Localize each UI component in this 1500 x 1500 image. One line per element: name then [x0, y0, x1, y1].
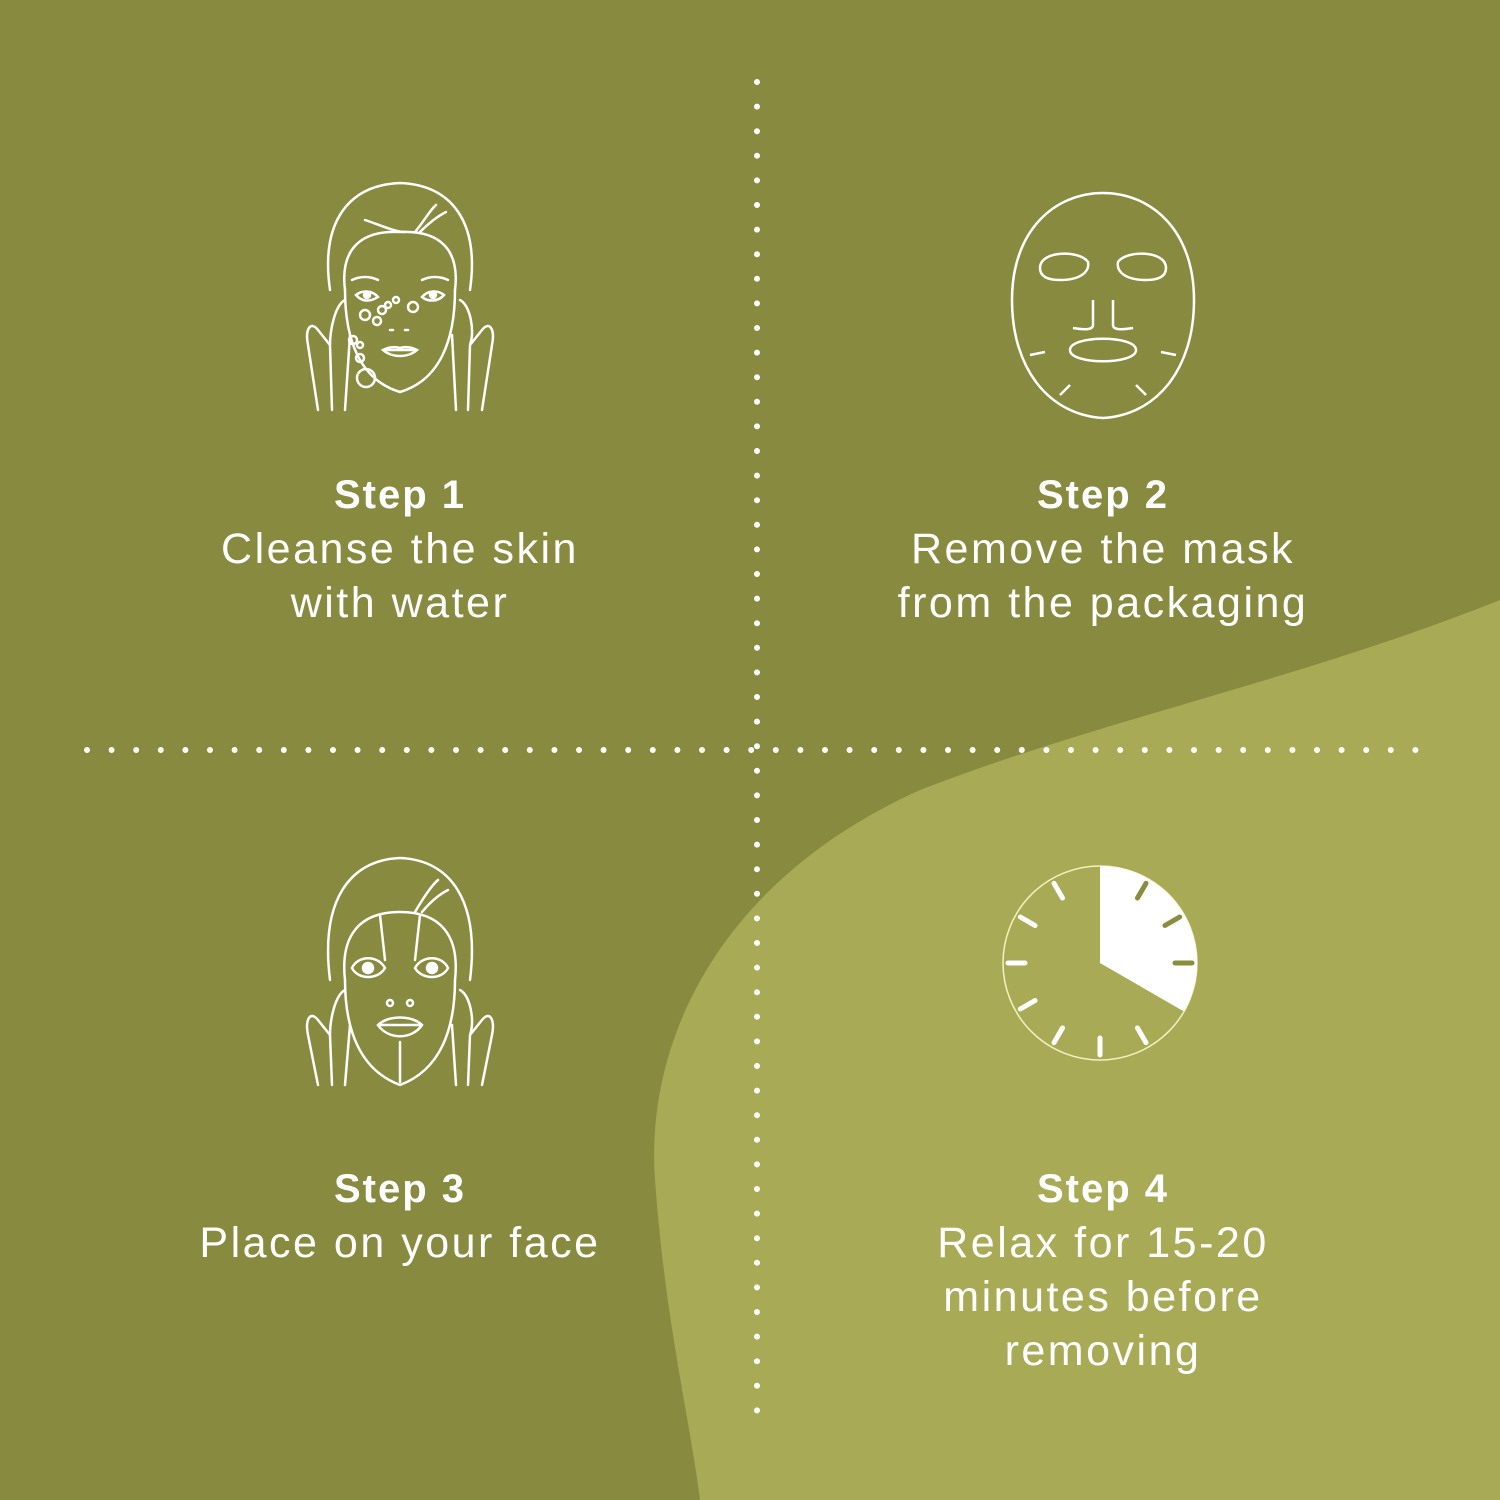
text: step 3: Place on your face — [199, 1219, 601, 1267]
text: step 1 — [221, 473, 579, 627]
text: step 4: Relax for 15-20 — [937, 1219, 1269, 1267]
icon: sheet mask — [1012, 193, 1194, 418]
text: step 1: Step 1 — [334, 473, 466, 517]
text: step 3 — [199, 1167, 601, 1267]
icon: clock — [1003, 866, 1197, 1060]
text: step 3: Step 3 — [334, 1167, 466, 1211]
text: step 4: Step 4 — [1037, 1167, 1169, 1211]
icon: face with mask — [307, 858, 493, 1085]
text: step 4: minutes before — [943, 1273, 1263, 1321]
text: step 4 — [937, 1167, 1269, 1375]
text: step 1: with water — [291, 579, 509, 627]
text: step 2: from the packaging — [898, 579, 1308, 627]
text: step 2 — [898, 473, 1308, 627]
icon: face cleansing — [307, 183, 493, 410]
text: step 2: Remove the mask — [911, 525, 1295, 573]
text: step 2: Step 2 — [1037, 473, 1169, 517]
text: step 4: removing — [1005, 1327, 1201, 1375]
text: step 1: Cleanse the skin — [221, 525, 579, 573]
background wave — [654, 600, 1500, 1500]
